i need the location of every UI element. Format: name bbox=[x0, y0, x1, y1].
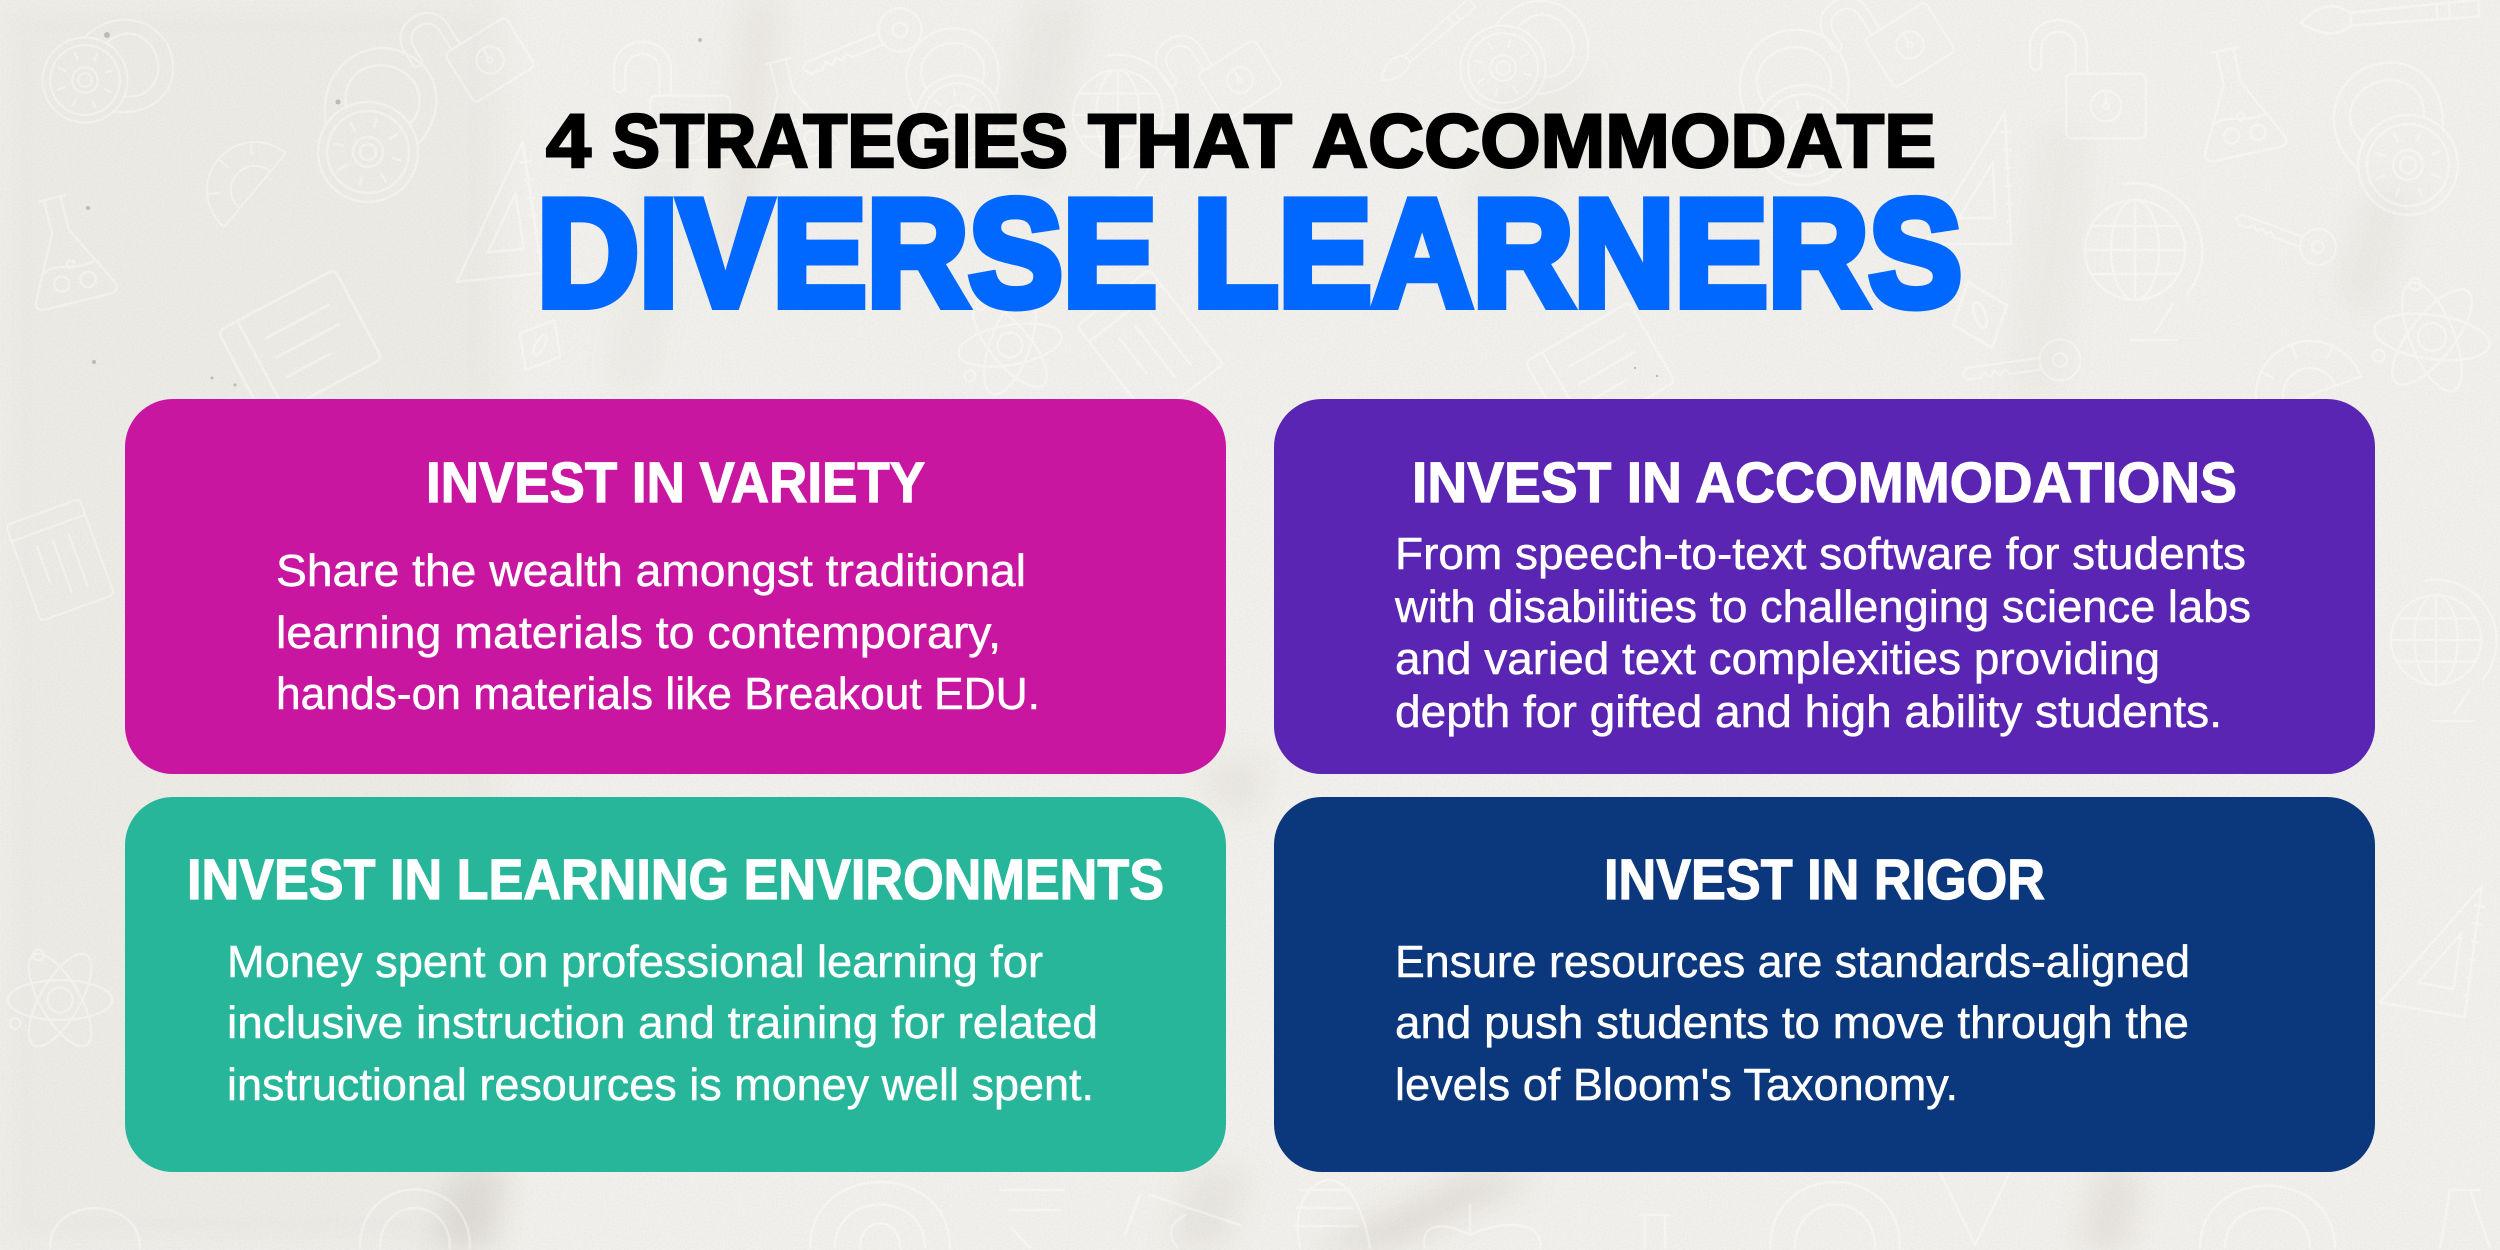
panel body text: Ensure resources are standards-aligned bbox=[1395, 936, 2190, 987]
panel: invest in accommodations bbox=[1274, 399, 2375, 774]
heading line: 4 strategies that accommodate: STRATEGIES bbox=[612, 99, 1068, 184]
heading line: 4 strategies that accommodate: ACCOMMODATE bbox=[1312, 99, 1936, 184]
panel body text: Money spent on professional learning for bbox=[227, 936, 1043, 987]
panel body text: From speech-to-text software for students bbox=[1395, 528, 2246, 579]
heading line: diverse learners: LEARNERS bbox=[1193, 168, 1962, 338]
panel heading: INVEST IN LEARNING ENVIRONMENTS bbox=[187, 848, 1164, 912]
panel body text bbox=[227, 936, 1098, 1110]
panel: invest in learning environments bbox=[125, 797, 1226, 1172]
panel body text bbox=[1394, 528, 2251, 737]
heading line: diverse learners bbox=[537, 168, 1962, 338]
panel body text: and varied text complexities providing bbox=[1395, 633, 2160, 684]
heading line: diverse learners: DIVERSE bbox=[537, 168, 1157, 338]
panel heading: INVEST IN VARIETY bbox=[426, 451, 925, 515]
heading line: 4 strategies that accommodate: 4 bbox=[546, 99, 591, 184]
panel body text: with disabilities to challenging science labs bbox=[1394, 581, 2251, 632]
panel heading: INVEST IN ACCOMMODATIONS bbox=[1412, 451, 2237, 515]
panel body text: depth for gifted and high ability students. bbox=[1395, 686, 2222, 737]
heading line: 4 strategies that accommodate bbox=[546, 99, 1936, 184]
panel body text: learning materials to contemporary, bbox=[276, 607, 1001, 658]
panel: invest in variety bbox=[125, 399, 1226, 774]
panel body text bbox=[276, 545, 1040, 719]
panel body text: Share the wealth amongst traditional bbox=[276, 545, 1026, 596]
panel: invest in rigor bbox=[1274, 797, 2375, 1172]
title bbox=[537, 99, 1962, 338]
heading line: 4 strategies that accommodate: THAT bbox=[1088, 99, 1292, 184]
panel heading: INVEST IN RIGOR bbox=[1604, 848, 2045, 912]
panel body text: instructional resources is money well spent. bbox=[227, 1059, 1094, 1110]
panel body text: and push students to move through the bbox=[1395, 997, 2189, 1048]
panel body text bbox=[1395, 936, 2190, 1110]
panel body text: inclusive instruction and training for related bbox=[227, 997, 1098, 1048]
panel body text: hands-on materials like Breakout EDU. bbox=[276, 668, 1040, 719]
panel body text: levels of Bloom's Taxonomy. bbox=[1395, 1059, 1958, 1110]
